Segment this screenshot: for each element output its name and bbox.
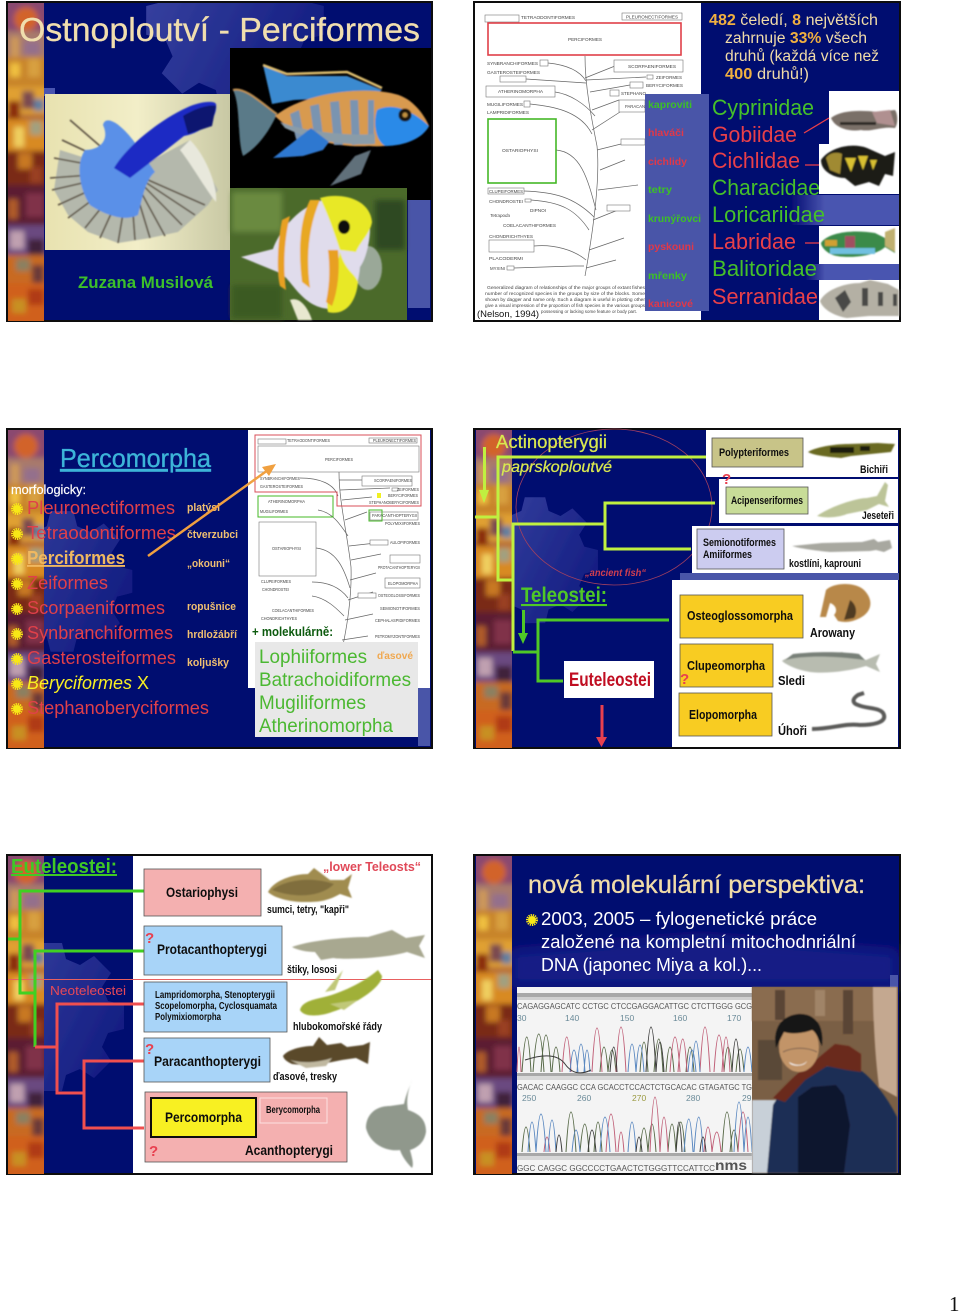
family list: Characidae [712,175,820,200]
image: DNA chromatogram: 29 [742,1093,752,1103]
phylogeny diagram: possessing or lacking some feature or body part. [541,309,637,314]
phylogeny diagram: shown by dagger and name only. Such a diagram is useful in plotting other [485,297,646,302]
image: DNA chromatogram: 280 [686,1093,700,1103]
label: molecular: + molekulárně: [252,625,333,639]
phylogeny diagram: LAMPRIDIFORMES [487,110,529,115]
Czech names: ropušnice [187,601,236,613]
phylogeny diagram small: POLYMIXIIFORMES [385,521,420,526]
photo: goby [829,91,899,144]
body text: 2003, 2005 – fylogenetické práce [541,909,817,929]
phylogeny diagram small: PROTACANTHOPTERYGII [378,565,420,570]
Czech names: hrdložábří [187,629,238,641]
phylogeny diagram small: PARACANTHOPTERYGII [372,513,417,518]
fish: carp [268,868,352,902]
phylogeny diagram small: SEMIONOTIFORMES [380,606,420,611]
phylogeny diagram small: CEPHALASPIDIFORMES [375,618,420,623]
card: basal teleosts: Arowany [810,625,856,640]
card: Acipenseriformes: Acipenseriformes [731,495,803,507]
image: DNA chromatogram: 260 [577,1093,591,1103]
heading: Teleostei: Teleostei: [521,584,607,607]
box: Protacanthopterygi [144,926,282,975]
tree lines green [513,620,669,681]
box: Ostariophysi: Ostariophysi [166,884,238,900]
molecular group box: Mugiliformes [259,692,366,714]
phylogeny diagram small: BERYCIFORMES [388,493,418,498]
phylogeny diagram small: CLUPEIFORMES [261,579,291,584]
panel: slide 4 Actinopterygii [471,425,901,755]
phylogeny diagram small: SYNBRANCHIFORMES [260,476,300,481]
box: Acanthopterygi [145,1092,347,1162]
statement: 482 families: druhů (každá více než [725,48,879,65]
order list with bullets: Synbranchiformes [27,622,173,643]
card: Polypteriformes: Polypteriformes [719,447,789,459]
Czech names: platýsi [187,502,220,514]
title: nová molekulární perspektiva: [528,871,865,899]
phylogeny diagram small: MUGILIFORMES [260,509,288,514]
phylogeny diagram small: CHONDROSTEI [262,587,289,592]
fish: cod [283,1037,370,1068]
phylogeny diagram: ATHERINOMORPHA [498,89,543,94]
phylogeny diagram: PARACAN [625,104,645,109]
heading: Euteleostei: [11,856,117,878]
phylogeny diagram small: CHONDRICHTHYES [261,616,297,621]
box: Paracanthopterygi [144,1038,270,1082]
phylogeny diagram small: ELOPOMORPHA [388,581,418,586]
bullet [527,915,537,925]
Czech names: „okouni“ [187,558,230,570]
card: basal teleosts: Úhoři [778,723,807,738]
photo: wrasse [819,226,899,264]
Euteleostei box [564,661,654,698]
panel: slide 1 Perciformes title [3,0,433,328]
phylogeny diagram small: OSTEOGLOSSIFORMES [378,593,420,598]
statement: 482 families: zahrnuje 33% všech [725,30,867,47]
card: Acipenseriformes: Jeseteři [862,510,894,522]
phylogeny diagram: STEPHANO [621,91,647,96]
body text: DNA (japonec Miya a kol.)... [541,955,762,975]
phylogeny diagram small: SCORPAENIFORMES [374,478,412,483]
family list [712,95,825,309]
Czech names: koljušky [187,657,230,669]
image: DNA chromatogram: 250 [522,1093,536,1103]
tree lines lime [475,457,715,651]
family list: Gobiidae [712,122,797,147]
box: deep sea orders [144,982,287,1032]
phylogeny diagram: Tetrapoda [490,213,511,218]
statement: 482 families: 482 čeledí, 8 největších [709,12,878,29]
blue panel with Czech names: kaproviti [648,99,692,111]
fish caption: hlubokomořské řády [293,1021,383,1033]
phylogeny diagram small: STEPHANOBERYCIFORMES [369,500,419,505]
photo: cichlid yellow-black [819,144,899,194]
phylogeny diagram: TETRAODONTIFORMES [521,15,575,20]
fish: deep sea [300,970,382,1016]
blue panel with Czech names: tetry [648,184,672,196]
body text: založené na kompletní mitochodnriální [541,932,856,952]
divider Neoteleostei [8,979,431,980]
watermark: nms [715,1157,747,1173]
blue panel with Czech names: pyskouni [648,241,694,253]
phylogeny diagram: OSTARIOPHYSI [502,148,538,153]
phylogeny diagram: ZEIFORMES [656,75,682,80]
blue panel with Czech names: krunýřovci [648,213,701,225]
order list with bullets: Tetraodontiformes [27,522,176,543]
box: deep sea orders: Polymixiomorpha [155,1012,221,1023]
panel: slide 5 Euteleostei [0,851,433,1181]
phylogeny diagram small: GASTEROSTEIFORMES [260,484,303,489]
citation: (Nelson, 1994) [477,309,539,320]
arrow lime [479,447,489,503]
box: Acanthopterygi: Acanthopterygi [245,1142,333,1158]
phylogeny diagram: PERCIFORMES [568,37,602,42]
phylogeny diagram: MUGILIFORMES [487,102,523,107]
order list with bullets [12,497,209,718]
image: DNA chromatogram: 150 [620,1013,634,1023]
order list with bullets: Zeiformes [27,572,108,593]
phylogeny diagram small: TETRAODONTIFORMES [287,438,330,443]
photo: Miya portrait [752,987,898,1173]
phylogeny diagram: PLACODERMI [489,256,523,261]
molecular group box: Lophiiformes [259,646,367,668]
phylogeny diagram: MYXINI [490,266,505,271]
panel: slide 2 families [473,1,901,322]
fish: sunfish [366,1080,426,1168]
card: basal teleosts: Elopomorpha [689,707,758,722]
box: Paracanthopterygi: ? [145,1041,154,1058]
decoration block right [408,200,430,308]
phylogeny diagram small: AULOPIFORMES [390,540,420,545]
arrow red [596,705,607,747]
phylogeny diagram small: COELACANTHIFORMES [272,608,314,613]
statement: 482 families: 400 druhů!) [725,66,809,83]
photo: grouper [819,280,899,320]
phylogeny diagram: BERYCIFORMES [646,83,683,88]
photo: butterflyfish [230,188,407,320]
image: DNA chromatogram: CAGAGGAGCATC CCTGC CTCCGAGGACATTGC CTCTTGGG GCG [517,1001,752,1011]
phylogeny diagram: number of recognized species in the groups by size of the blocks. Some [485,291,646,296]
blue panel with Czech names: mřenky [648,270,687,282]
image: DNA chromatogram: 170 [727,1013,741,1023]
phylogeny diagram small: OSTARIOPHYSI [272,546,301,551]
image: DNA chromatogram: 30 [517,1013,527,1023]
subheading: paprskoploutvé [501,459,612,476]
label: lower Teleosts: „lower Teleosts“ [323,859,421,874]
phylogeny diagram: CHONDROSTEI [489,199,523,204]
box: Acanthopterygi: Berycomorpha [266,1105,320,1116]
question marks: ? [680,671,689,688]
photo: cichlid on black [230,48,431,200]
card: basal teleosts: Sledi [778,673,805,688]
card: basal teleosts [672,580,898,747]
card: Polypteriformes: Bichiři [860,464,888,476]
blue panel with Czech names: hlaváči [648,127,684,139]
arrow green [518,610,528,644]
phylogeny diagram small: PLEURONECTIFORMES [373,438,416,443]
fish caption: štiky, lososi [287,964,337,976]
Czech names [187,502,238,669]
phylogeny diagram: COELACANTHIFORMES [503,223,556,228]
order list with bullets: Beryciformes X [27,672,149,693]
page number: 1 [949,1292,960,1316]
image: DNA chromatogram: 140 [565,1013,579,1023]
box: Paracanthopterygi: Paracanthopterygi [154,1053,261,1069]
phylogeny diagram: SCORPAENIFORMES [628,64,676,69]
photo: betta fish [45,94,230,250]
label: morphological: morfologicky: [11,482,86,497]
phylogeny diagram small: PETROMYZONTIFORMES [375,634,420,639]
phylogeny diagram: CHONDRICHTHYES [489,234,533,239]
fish: pike [292,930,425,960]
phylogeny diagram: give a visual impression of the proportion of fish species in the various groups [485,303,646,308]
family list: Serranidae [712,284,818,309]
phylogeny diagram: SYNBRANCHIFORMES [487,61,538,66]
panel: slide 6 molecular perspective [471,851,901,1181]
fish caption: sumci, tetry, "kapři" [267,904,349,916]
panel: slide 3 Percomorpha [0,425,433,755]
arrow to Perciformes [148,464,276,556]
image: DNA chromatogram: 160 [673,1013,687,1023]
box: deep sea orders: Lampridomorpha, Stenopterygii [155,990,275,1001]
family list: Cichlidae [712,148,800,173]
box: deep sea orders: Scopelomorpha, Cyclosquamata [155,1001,277,1012]
box: Protacanthopterygi: Protacanthopterygi [157,941,267,957]
phylogeny diagram small [248,430,430,688]
order list with bullets: Scorpaeniformes [27,597,165,618]
card: Semionotiformes Amiiformes: Amiiformes [703,549,752,561]
phylogeny diagram: Generalized diagram of relationships of the major groups of extant fishes [487,285,646,290]
title: Percomorpha [60,443,212,473]
ancient fish ellipse [516,429,712,585]
family list: Loricariidae [712,202,825,227]
molecular group box: Atherinomorpha [259,715,393,737]
box: Ostariophysi [144,869,261,916]
title: Ostnoploutví - Perciformes [19,11,420,48]
box: Acanthopterygi: ? [149,1143,158,1160]
blue panel with Czech names: cichlidy [648,156,687,168]
question marks: ? [722,471,731,488]
order list with bullets: Stephanoberyciformes [27,697,209,718]
decoration bands [790,195,899,280]
image: DNA chromatogram: GGC CAGGC GGCCCCTGAACTCTGGGTTCCATTCC [517,1163,715,1173]
order list with bullets: Gasterosteiformes [27,647,176,668]
phylogeny diagram small: ATHERINOMORPHA [268,499,305,504]
family list: Balitoridae [712,256,817,281]
molecular group box: Batrachoidiformes [259,669,411,691]
blue panel with Czech names: kanicové [648,298,693,310]
body text [541,909,856,975]
phylogeny diagram: GASTEROSTEIFORMES [487,70,540,75]
phylogeny diagram: CLUPEIFORMES [489,189,523,194]
card: basal teleosts: Clupeomorpha [687,658,766,673]
card: Acipenseriformes [719,479,898,523]
tree green [8,891,144,1047]
decoration block [418,688,430,746]
Euteleostei box: Euteleostei [569,670,651,691]
card: basal teleosts: Osteoglossomorpha [687,608,794,623]
Czech names: čtverzubci [187,529,238,541]
molecular group box [255,642,418,737]
label: Neoteleostei: Neoteleostei [50,983,126,998]
molecular group box: ďasové [377,650,413,662]
phylogeny diagram small: PERCIFORMES [325,457,353,462]
box: Acanthopterygi: Percomorpha [165,1109,242,1125]
connectors [804,118,829,243]
image: DNA chromatogram: 270 [632,1093,646,1103]
image: DNA chromatogram [517,987,752,1173]
phylogeny diagram: DIPNOI [530,208,546,213]
card: Semionotiformes Amiiformes: kostlíni, kaprouni [789,558,861,570]
blue panel with Czech names [645,94,709,311]
author name: Zuzana Musilová [78,273,214,292]
order list with bullets: Pleuronectiformes [27,497,175,518]
card: Polypteriformes [706,430,898,477]
card: Semionotiformes Amiiformes: Semionotiformes [703,537,776,549]
question marks [680,471,731,688]
family list: Labridae [712,229,796,254]
phylogeny diagram [475,3,701,320]
card: Semionotiformes Amiiformes [692,526,898,573]
label: ancient fish: „ancient fish“ [584,568,646,579]
box: Protacanthopterygi: ? [145,930,154,947]
statement: 482 families [709,12,879,83]
trace traces [517,1027,752,1152]
heading: Actinopterygii: Actinopterygii [496,432,607,452]
phylogeny diagram: PLEURONECTIFORMES [626,14,678,20]
order list with bullets: Perciformes [27,547,125,568]
fish caption: ďasové, tresky [273,1071,338,1083]
family list: Cyprinidae [712,95,814,120]
tree red [35,1004,144,1128]
phylogeny diagram small: ZEIFORMES [397,487,419,492]
image: DNA chromatogram: GACAC CAAGGC CCA GCACCTCCACTCTGCACAC GTAGATGC TG [517,1082,752,1092]
